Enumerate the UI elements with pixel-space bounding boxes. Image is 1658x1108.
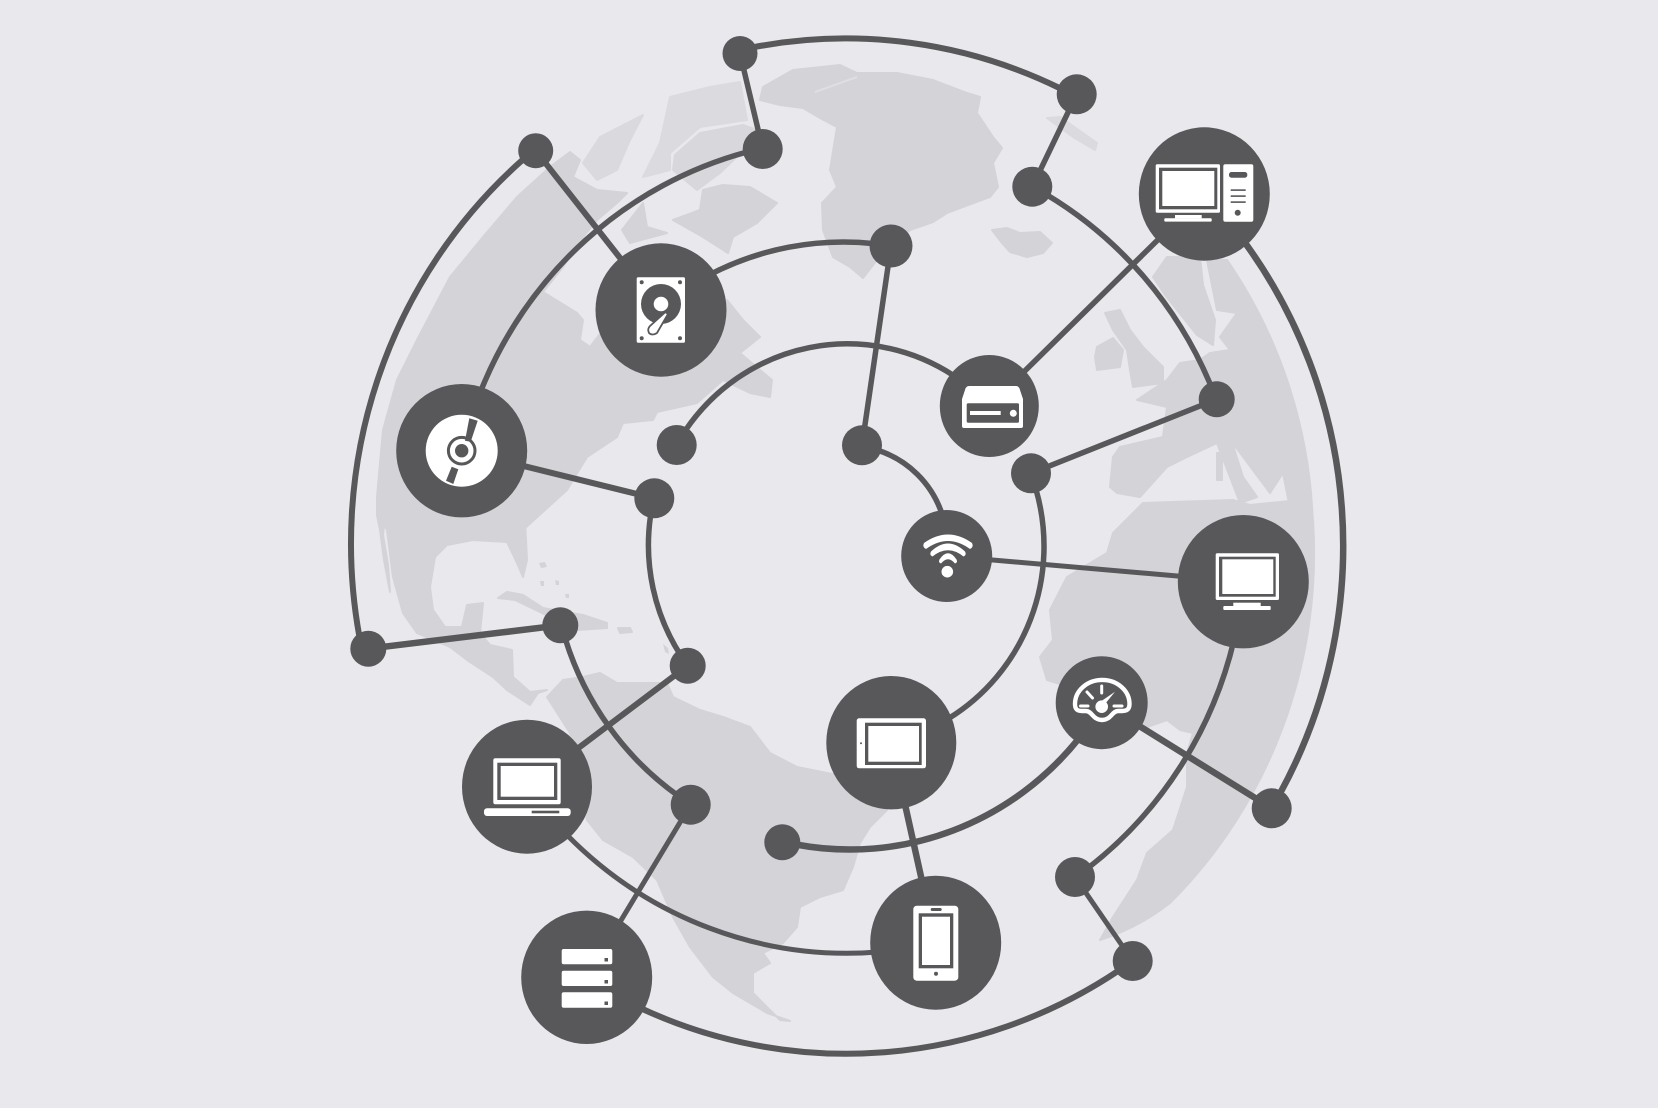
node bbox=[764, 824, 800, 860]
icon: server stack bbox=[521, 911, 652, 1044]
land: Arctic island central bbox=[673, 125, 757, 190]
second ring arc upper left bbox=[480, 152, 747, 393]
outer ring arc right bbox=[1240, 236, 1343, 794]
connector gauge to node bbox=[1102, 703, 1272, 808]
ring arcs bbox=[351, 38, 1343, 1054]
node bbox=[1012, 167, 1052, 207]
icon: external drive bbox=[940, 355, 1039, 457]
connector node to server bbox=[587, 805, 691, 977]
node bbox=[1011, 453, 1051, 493]
second ring arc upper right bbox=[1046, 195, 1211, 386]
land: South America bbox=[547, 673, 887, 1021]
third ring arc bottom bbox=[796, 737, 1080, 850]
land: Iceland bbox=[992, 228, 1052, 257]
connector disc to node bbox=[462, 451, 654, 498]
node bbox=[1055, 857, 1095, 897]
land: Hispaniola bbox=[618, 628, 632, 633]
land: Corsica and Sardinia bbox=[1217, 453, 1222, 480]
node bbox=[870, 224, 912, 268]
node bbox=[670, 648, 706, 684]
connector centre vertical bbox=[862, 246, 891, 445]
node bbox=[350, 631, 386, 667]
icon: smartphone bbox=[870, 876, 1001, 1010]
connector Europe nodes bbox=[1031, 399, 1217, 473]
node bbox=[842, 425, 882, 465]
land: Southampton island bbox=[622, 203, 667, 243]
icon: wifi bbox=[901, 510, 992, 602]
connector wifi to monitor bbox=[947, 556, 1243, 582]
connector top left bbox=[740, 54, 763, 149]
land: Arctic island west bbox=[583, 115, 643, 180]
third ring arc left bbox=[566, 640, 678, 796]
connector left nodes bbox=[368, 625, 560, 649]
connector bottom right bbox=[1075, 877, 1133, 961]
connector node to laptop bbox=[527, 666, 688, 787]
fourth ring arc right bbox=[948, 490, 1044, 718]
fourth ring arc top bbox=[686, 344, 954, 430]
land: Greenland bbox=[760, 65, 1002, 278]
land: Cuba bbox=[498, 592, 607, 630]
land: Svalbard bbox=[1047, 117, 1097, 150]
outer ring arc left bbox=[351, 160, 523, 645]
icon: laptop bbox=[462, 720, 592, 854]
node bbox=[671, 785, 711, 825]
land: Europe and Russia bbox=[1110, 260, 1313, 530]
land: Arctic island north bbox=[643, 82, 747, 177]
straight connector lines bbox=[368, 54, 1272, 977]
icon: optical disc bbox=[396, 384, 527, 517]
globe world map bbox=[377, 65, 1314, 1021]
third ring arc top bbox=[708, 242, 874, 276]
land: Baffin region bbox=[673, 185, 777, 253]
second ring arc lower right bbox=[1088, 640, 1234, 868]
node bbox=[722, 36, 758, 71]
node bbox=[634, 478, 674, 518]
second ring arc bottom bbox=[567, 835, 878, 953]
land: North America bbox=[377, 152, 772, 705]
Greenland ice streak bbox=[815, 77, 857, 92]
land: Caribbean islets bbox=[539, 562, 669, 654]
node bbox=[657, 425, 697, 465]
icon: tablet bbox=[826, 676, 956, 809]
small network nodes bbox=[350, 36, 1292, 981]
inner ring arc bbox=[877, 450, 942, 514]
node bbox=[542, 607, 578, 643]
connector desktop to drive bbox=[989, 194, 1204, 406]
icon: hard disk drive bbox=[596, 243, 726, 377]
land: Ireland bbox=[1095, 338, 1123, 370]
icon: desktop computer bbox=[1139, 127, 1270, 261]
node bbox=[1199, 381, 1235, 417]
node bbox=[1113, 941, 1153, 981]
land: Britain bbox=[1105, 310, 1163, 387]
land: Scandinavia bbox=[1153, 257, 1215, 345]
node bbox=[1057, 74, 1097, 114]
icon: flat monitor bbox=[1178, 515, 1309, 648]
connector top right bbox=[1032, 94, 1077, 187]
node bbox=[743, 129, 783, 169]
fourth ring arc left bbox=[648, 516, 680, 655]
land: Africa and Asia bbox=[1040, 500, 1314, 940]
connector tablet to phone bbox=[891, 743, 936, 943]
outer ring arc top bbox=[753, 38, 1060, 88]
node bbox=[518, 133, 553, 168]
icon: speed gauge bbox=[1056, 656, 1148, 749]
node bbox=[1252, 788, 1292, 828]
connector to hard disk bbox=[536, 151, 661, 310]
outer ring arc bottom bbox=[636, 970, 1120, 1054]
